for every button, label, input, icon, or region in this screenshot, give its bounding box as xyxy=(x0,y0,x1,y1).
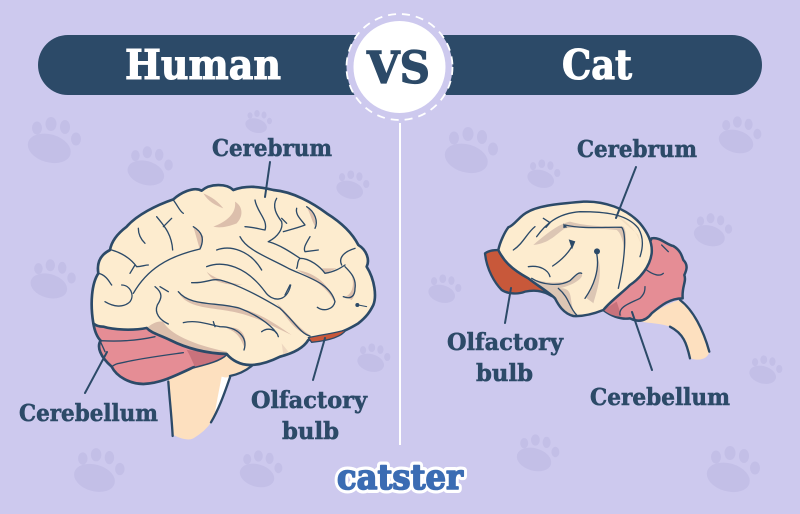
label: Olfactory bulb (human): bulb xyxy=(282,418,339,445)
cerebrum outline xyxy=(498,202,652,316)
VS badge: VS xyxy=(366,43,430,94)
olfactory bulb xyxy=(308,330,346,342)
cerebrum shading xyxy=(147,193,356,355)
cerebellum xyxy=(603,238,687,321)
logo: catster: catster xyxy=(337,457,464,498)
label: Cerebrum (human): Cerebrum xyxy=(212,135,332,162)
leader lines: human xyxy=(85,162,325,393)
cerebrum xyxy=(498,202,652,316)
label: Cerebellum (human): Cerebellum xyxy=(19,400,158,427)
label: Olfactory bulb (human): Olfactory xyxy=(251,387,368,414)
leader lines: cat xyxy=(505,167,652,370)
human brain xyxy=(92,185,375,439)
title bar xyxy=(38,35,762,95)
label: Cerebrum (cat): Cerebrum xyxy=(577,136,697,163)
VS badge xyxy=(346,14,452,120)
heading: Human: Human xyxy=(125,41,281,89)
cerebrum folds xyxy=(98,198,355,350)
paw print pattern xyxy=(24,110,782,497)
cerebrum shading xyxy=(532,213,642,315)
cerebellum xyxy=(93,323,227,384)
heading: Cat: Cat xyxy=(562,41,632,89)
label: Cerebellum (cat): Cerebellum xyxy=(590,384,730,411)
center divider xyxy=(399,123,401,445)
label: Olfactory bulb (cat): Olfactory xyxy=(447,329,564,356)
label: Olfactory bulb (cat): bulb xyxy=(476,360,533,387)
cerebrum outline xyxy=(92,185,375,365)
logo: catster: catster xyxy=(337,457,464,498)
cerebrum xyxy=(92,185,375,365)
brain stem xyxy=(640,300,709,360)
cat brain xyxy=(485,202,709,360)
olfactory bulb xyxy=(485,250,552,296)
brain stem xyxy=(168,353,252,439)
cerebrum folds xyxy=(513,212,642,315)
